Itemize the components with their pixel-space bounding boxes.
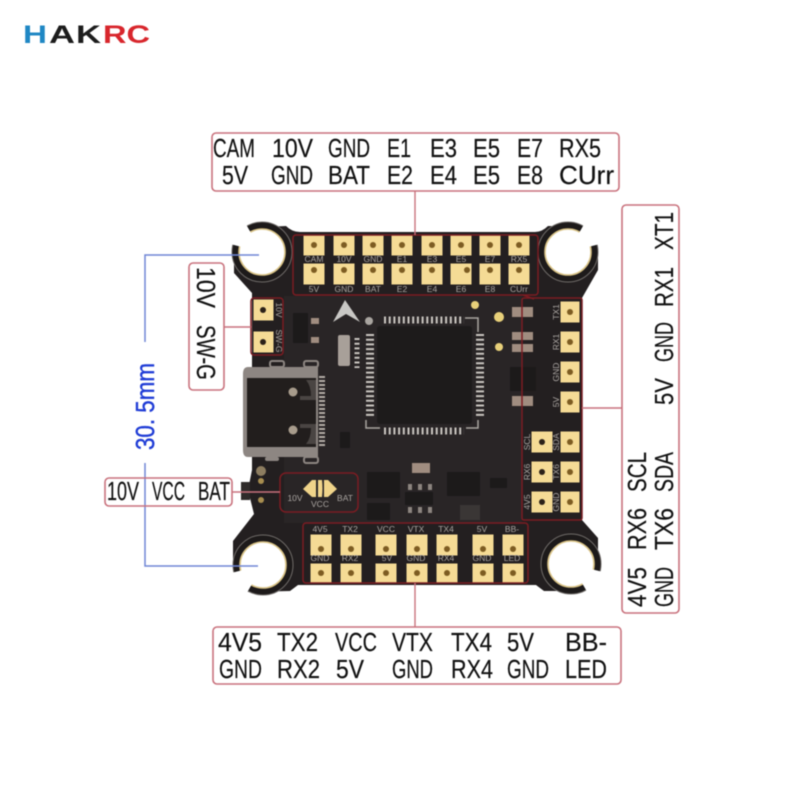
right pads [522, 302, 579, 512]
solder jumper: 10V VCC BAT: VCC [311, 499, 329, 509]
callout: bottom pins: LED [565, 654, 607, 684]
callout: top pins: CAM [213, 133, 255, 163]
callout: top pins: E1 [387, 133, 411, 163]
right pads: SDA [551, 433, 561, 451]
logo: HakRC [23, 21, 150, 49]
callout: bottom pins: RX4 [451, 654, 493, 684]
solder jumper: 10V VCC BAT: BAT [337, 493, 353, 503]
callout: bottom pins: TX4 [451, 627, 492, 657]
top pads: E4 [427, 284, 437, 294]
left pads: 10V and SW-G [254, 300, 284, 352]
right pads: RX6 [522, 463, 532, 480]
callout: bottom pins: 4V5 [218, 627, 262, 657]
callout: right pins: GND [649, 567, 679, 607]
top pads [304, 235, 529, 294]
callout: top pins: E5 [473, 160, 500, 190]
callout: top pins: BAT [328, 160, 370, 190]
bottom pads: RX2 [342, 553, 359, 563]
bottom pads: 5V [382, 553, 393, 563]
logo: HakRC: RC [103, 21, 150, 49]
callout: 10V SW-G: 10V [191, 267, 221, 309]
callout: right pins: 5V [649, 377, 679, 405]
right pads: GND [551, 493, 561, 511]
solder jumper: 10V VCC BAT: 10V [287, 493, 303, 503]
bottom pads: LED [504, 553, 520, 563]
callout: 10V VCC BAT: BAT [198, 476, 230, 506]
callout: top pins: 5V [222, 160, 249, 190]
callout: bottom pins [213, 583, 621, 684]
callout: right pins: TX6 [649, 508, 679, 550]
left pads: 10V and SW-G: 10V [274, 302, 284, 318]
top pads: CAM [305, 254, 323, 264]
callout: top pins: 10V [272, 133, 314, 163]
callout: top pins: E8 [517, 160, 543, 190]
bottom pads: TX4 [438, 524, 454, 534]
callout: right pins: GND [649, 322, 679, 362]
right pads: GND [551, 363, 561, 381]
bottom pads: GND [473, 553, 491, 563]
USB-C connector [243, 361, 322, 463]
top pads: RX5 [511, 254, 528, 264]
top pads: E2 [397, 284, 407, 294]
bottom pads [311, 524, 523, 583]
right pads: 4V5 [522, 494, 532, 510]
mounting holes [226, 214, 607, 603]
top pads: CUrr [510, 284, 528, 294]
top pads: E7 [485, 254, 495, 264]
bottom pads: 4V5 [312, 524, 328, 534]
logo: HakRC: H [23, 21, 47, 49]
callout: right pins: SCL [622, 452, 652, 492]
callout: bottom pins: 5V [336, 654, 365, 684]
callout: bottom pins: GND [392, 654, 433, 684]
bottom pads: 5V [477, 524, 488, 534]
callout: bottom pins: GND [219, 654, 262, 684]
callout: right pins: RX6 [622, 508, 652, 550]
top pads: E5 [456, 254, 466, 264]
callout: bottom pins: BB- [565, 627, 607, 657]
board outline [233, 226, 598, 592]
callout: bottom pins: 5V [507, 627, 535, 657]
dimension label: 30. 5mm [130, 363, 160, 450]
bottom pads: BB- [505, 524, 519, 534]
bottom pads: GND [311, 553, 329, 563]
bottom pads: VCC [377, 524, 395, 534]
callout: right pins [582, 205, 679, 613]
arrow mark [333, 300, 360, 322]
right pads: RX1 [551, 333, 561, 350]
callout: top pins: GND [328, 133, 370, 163]
callout: right pins: 4V5 [622, 567, 652, 607]
logo: HakRC: A [49, 21, 75, 49]
callout: top pins [212, 133, 619, 235]
callout: 10V SW-G: SW-G [191, 325, 221, 380]
callout: 10V VCC BAT: VCC [152, 476, 185, 506]
board centre tone [284, 296, 522, 523]
right pads: SCL [522, 433, 532, 450]
bottom pads: RX4 [438, 553, 455, 563]
top pads: 5V [309, 284, 320, 294]
bottom pads: TX2 [342, 524, 358, 534]
callout: top pins: E3 [430, 133, 457, 163]
callout: bottom pins: VTX [392, 627, 433, 657]
circuit board [226, 214, 607, 603]
bottom pads: VTX [408, 524, 425, 534]
top pads: BAT [365, 284, 381, 294]
microcontroller chip [357, 318, 480, 431]
callout: top pins: RX5 [559, 133, 601, 163]
callout: top pins: E7 [517, 133, 543, 163]
top pads: E3 [427, 254, 437, 264]
callout: 10V SW-G [189, 263, 251, 390]
top pads: GND [335, 284, 353, 294]
bottom pads: GND [407, 553, 425, 563]
solder jumper: 10V VCC BAT [287, 480, 353, 509]
top pads: E1 [397, 254, 407, 264]
callout: right pins: SDA [649, 452, 679, 492]
right pads: TX1 [551, 304, 561, 320]
callout: right pins: RX1 [649, 267, 679, 307]
dimension line [130, 255, 259, 566]
crystal and small components [241, 301, 536, 520]
top pads: 10V [336, 254, 352, 264]
callout: right pins: XT1 [649, 212, 679, 250]
top pads: E6 [456, 284, 466, 294]
callout: 10V VCC BAT [105, 476, 280, 506]
right pads: 5V [551, 396, 561, 407]
top pads: GND [364, 254, 382, 264]
callout: bottom pins: GND [507, 654, 549, 684]
callout: top pins: CUrr [559, 160, 614, 190]
callout: 10V VCC BAT: 10V [107, 476, 139, 506]
callout: bottom pins: TX2 [277, 627, 318, 657]
callout: bottom pins: RX2 [277, 654, 320, 684]
callout: top pins: GND [271, 160, 313, 190]
top pads: E8 [485, 284, 495, 294]
callout: top pins: E4 [430, 160, 457, 190]
callout: top pins: E2 [387, 160, 413, 190]
callout: top pins: E5 [473, 133, 500, 163]
left pads: 10V and SW-G: SW-G [274, 330, 284, 352]
callout: bottom pins: VCC [335, 627, 377, 657]
dark red highlight frames [251, 235, 582, 583]
logo: HakRC: K [76, 21, 101, 49]
right pads: TX6 [551, 464, 561, 480]
